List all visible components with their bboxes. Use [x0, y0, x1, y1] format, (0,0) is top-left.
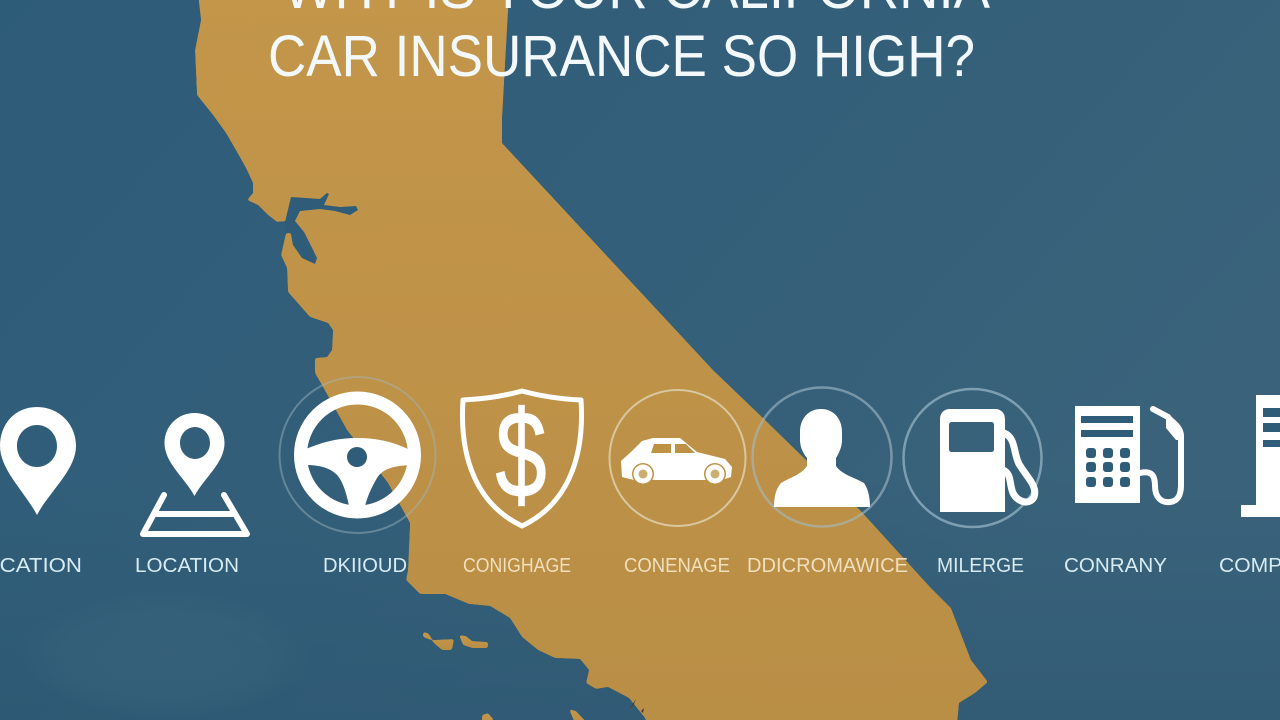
circle ring: [752, 388, 892, 526]
wheel rim: [300, 398, 414, 512]
pin: [164, 413, 224, 496]
car body: [621, 438, 732, 480]
circle ring: [610, 390, 746, 526]
person silhouette: [774, 409, 870, 507]
channel islands: [423, 632, 454, 650]
icon: car in circle: [610, 390, 746, 526]
map base: [143, 495, 247, 534]
pump hose: [1003, 433, 1035, 502]
left wheel: [632, 463, 654, 485]
dollar sign: $: [495, 387, 547, 524]
calculator display bars: [1081, 416, 1133, 437]
factor labels: [0, 555, 1280, 577]
pump body: [940, 409, 1005, 512]
icon: company building, cropped: [1241, 395, 1280, 517]
label: mileage: MILERGE: [937, 555, 1024, 577]
nozzle hose: [1140, 409, 1181, 502]
icon: steering wheel: [280, 377, 436, 533]
nozzle head: [1166, 414, 1184, 440]
san francisco bay: [285, 193, 358, 264]
icon: shield with dollar: [462, 387, 582, 526]
icon: fuel pump in circle: [904, 389, 1042, 527]
label: location: LOCATION: [135, 555, 239, 577]
circle ring: [904, 389, 1042, 527]
building windows: [1263, 408, 1280, 447]
shield outline: [462, 391, 582, 526]
outer thin ring: [280, 377, 436, 533]
car windows: [651, 444, 695, 453]
title line 2: CAR INSURANCE SO HIGH?: [268, 24, 975, 89]
label: company 1: CONRANY: [1064, 555, 1167, 577]
label: demographics: DDICROMAWICE: [747, 555, 908, 577]
wheel spokes: [306, 438, 410, 506]
label: driving: DKIIOUD: [323, 555, 407, 577]
map: California: [195, 0, 988, 720]
wheel hub: [347, 447, 367, 467]
coastal inlet sliver: [630, 699, 644, 713]
icon: calculator and fuel nozzle: [1075, 406, 1184, 503]
calculator body: [1075, 406, 1140, 503]
label: coverage 1: CONIGHAGE: [463, 555, 571, 577]
calculator keypad: [1086, 448, 1130, 487]
state shape: [195, 0, 988, 720]
icon: person in circle: [752, 388, 892, 526]
icon: location pin, cropped: [0, 407, 76, 515]
icon: location pin on map: [143, 413, 247, 534]
label: coverage 2: CONENAGE: [624, 555, 730, 577]
right wheel: [704, 463, 726, 485]
title: [268, 0, 990, 89]
building: [1241, 395, 1280, 517]
